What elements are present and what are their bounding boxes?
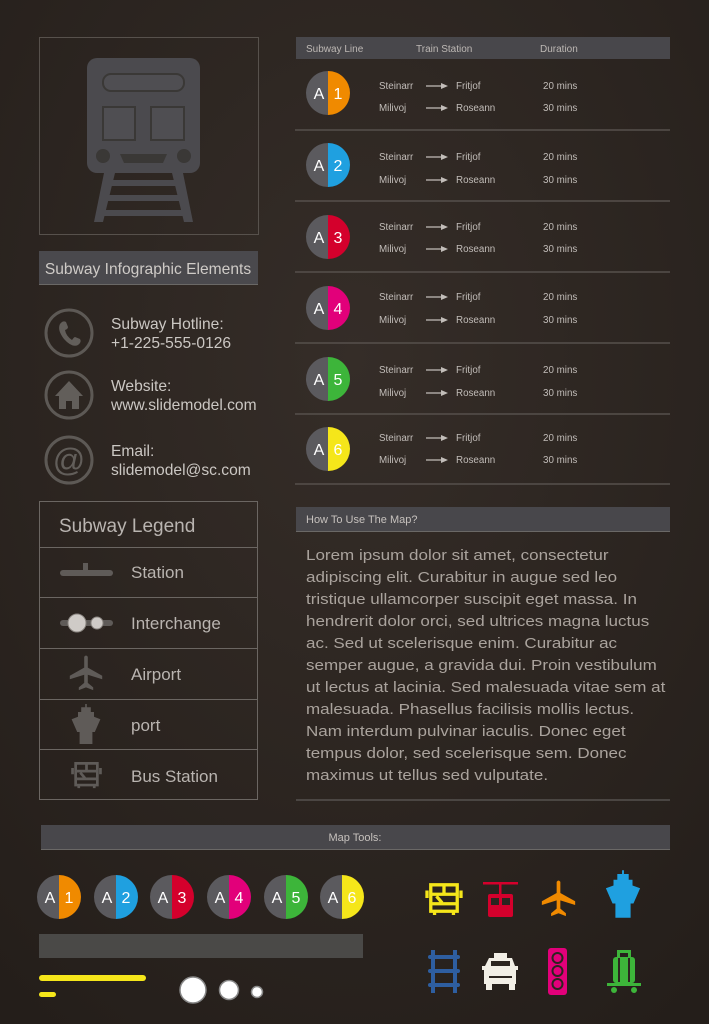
row 5: 30 mins: [543, 388, 577, 399]
tool badges: [37, 875, 364, 919]
tool badges: A: [102, 890, 113, 907]
how to use heading: [296, 507, 670, 532]
white dots: [180, 977, 262, 1003]
title bar: [39, 251, 258, 284]
row 4: A: [314, 301, 325, 318]
row 1: Steinarr: [379, 81, 414, 92]
row 4: Steinarr: [379, 292, 414, 303]
contact: email: [46, 437, 251, 483]
legend: port: port: [131, 716, 161, 735]
contact: hotline: Subway Hotline:: [111, 316, 224, 333]
paragraph: Nam interdum pulvinar iaculis. Donec eget: [306, 723, 626, 740]
row 6: 20 mins: [543, 433, 577, 444]
paragraph: Lorem ipsum dolor sit amet, consectetur: [306, 547, 609, 564]
tool badges: A: [45, 890, 56, 907]
tool badges: A: [215, 890, 226, 907]
row 3: 30 mins: [543, 244, 577, 255]
contact: email: @: [53, 442, 85, 478]
row 6: A: [314, 442, 325, 459]
tool badges: 6: [348, 890, 357, 907]
panel: subway legend: [39, 502, 258, 800]
row 6: Milivoj: [379, 455, 406, 466]
tool badges: A: [328, 890, 339, 907]
paragraph: malesuada. Phasellus facilisis mollis lectus.: [306, 701, 634, 718]
row 5: [306, 357, 577, 401]
icon: rails: [428, 950, 460, 993]
row 3: Steinarr: [379, 222, 414, 233]
title bar: Subway Infographic Elements: [45, 261, 251, 278]
icon: ship: [606, 870, 640, 918]
row 2: [306, 143, 577, 187]
row 2: 2: [334, 158, 343, 175]
contact: email: slidemodel@sc.com: [111, 462, 251, 479]
row 1: [306, 71, 577, 115]
paragraph: ut lectus at lacinia. Sed malesuada vitae sem at: [306, 679, 666, 696]
row 4: Roseann: [456, 315, 495, 326]
row 2: 30 mins: [543, 175, 577, 186]
row 4: 20 mins: [543, 292, 577, 303]
row 2: Roseann: [456, 175, 495, 186]
contact: hotline: [46, 310, 231, 356]
table header: Train Station: [416, 44, 472, 55]
paragraph: adipiscing elit. Curabitur in augue sed leo: [306, 569, 617, 586]
legend: interchange: Interchange: [131, 614, 221, 633]
gray bar: [39, 934, 363, 958]
icon: traffic light: [548, 948, 567, 995]
legend heading: Subway Legend: [59, 516, 195, 537]
row 2: A: [314, 158, 325, 175]
icon: train: [87, 58, 200, 222]
legend: port: [72, 704, 161, 744]
row 1: Roseann: [456, 103, 495, 114]
row 4: 30 mins: [543, 315, 577, 326]
tool badges: 4: [235, 890, 244, 907]
icon: bus: [427, 885, 461, 915]
contact: website: Website:: [111, 378, 171, 395]
row 5: Fritjof: [456, 365, 481, 376]
tool badges: 1: [65, 890, 74, 907]
legend: airport: Airport: [131, 665, 181, 684]
row 5: A: [314, 372, 325, 389]
legend: bus station: [73, 763, 218, 788]
row 1: 1: [334, 86, 343, 103]
row 3: [306, 215, 577, 259]
paragraph: [306, 547, 666, 784]
table header: Duration: [540, 44, 578, 55]
tool badges: 5: [292, 890, 301, 907]
row 3: Milivoj: [379, 244, 406, 255]
paragraph: maximus ut tellus sed vulputate.: [306, 767, 548, 784]
icon: luggage: [607, 950, 641, 993]
contact: hotline: +1-225-555-0126: [111, 335, 231, 352]
row 4: Milivoj: [379, 315, 406, 326]
row 1: A: [314, 86, 325, 103]
paragraph: tristique ullamcorper suscipit eget massa. In: [306, 591, 637, 608]
row 2: 20 mins: [543, 152, 577, 163]
contact: website: [46, 372, 257, 418]
map tools bar: [41, 825, 670, 850]
row 3: Roseann: [456, 244, 495, 255]
row 4: Fritjof: [456, 292, 481, 303]
paragraph: hendrerit dolor orci, sed ultrices magna luctus: [306, 613, 649, 630]
row 1: 20 mins: [543, 81, 577, 92]
contact: website: www.slidemodel.com: [110, 397, 257, 414]
row 6: Steinarr: [379, 433, 414, 444]
row 3: 3: [334, 230, 343, 247]
map tools bar: Map Tools:: [328, 832, 382, 844]
row 6: [306, 427, 577, 471]
icon: plane: [542, 880, 575, 916]
tool badges: A: [272, 890, 283, 907]
table header: [296, 37, 670, 59]
table header: Subway Line: [306, 44, 364, 55]
icon: cable car: [483, 882, 518, 917]
tool badges: A: [158, 890, 169, 907]
row 5: Milivoj: [379, 388, 406, 399]
row 1: Milivoj: [379, 103, 406, 114]
tool badges: 3: [178, 890, 187, 907]
row 6: 6: [334, 442, 343, 459]
row 6: 30 mins: [543, 455, 577, 466]
paragraph: semper augue, a gravida dui. Proin vestibulum: [306, 657, 657, 674]
row 3: A: [314, 230, 325, 247]
row 4: [306, 286, 577, 330]
row 1: Fritjof: [456, 81, 481, 92]
row 3: Fritjof: [456, 222, 481, 233]
legend: airport: [70, 655, 181, 690]
legend: bus station: Bus Station: [131, 767, 218, 786]
row 5: Roseann: [456, 388, 495, 399]
row 2: Steinarr: [379, 152, 414, 163]
panel: train image: [40, 38, 258, 234]
row 6: Roseann: [456, 455, 495, 466]
legend: station: [60, 563, 184, 582]
contact: email: Email:: [111, 443, 154, 460]
row 4: 4: [334, 301, 343, 318]
paragraph: tempus dolor, sed scelerisque sem. Donec: [306, 745, 627, 762]
row 3: 20 mins: [543, 222, 577, 233]
row 6: Fritjof: [456, 433, 481, 444]
tool badges: 2: [122, 890, 131, 907]
row 2: Fritjof: [456, 152, 481, 163]
table rows: [295, 71, 670, 484]
paragraph: ac. Sed ut scelerisque enim. Curabitur ac: [306, 635, 617, 652]
yellow lines: [39, 975, 146, 997]
legend: interchange: [60, 614, 221, 633]
row 1: 30 mins: [543, 103, 577, 114]
row 5: 20 mins: [543, 365, 577, 376]
row 5: 5: [334, 372, 343, 389]
row 5: Steinarr: [379, 365, 414, 376]
how to use heading: How To Use The Map?: [306, 514, 417, 526]
row 2: Milivoj: [379, 175, 406, 186]
icon: taxi: [482, 953, 518, 990]
legend: station: Station: [131, 563, 184, 582]
